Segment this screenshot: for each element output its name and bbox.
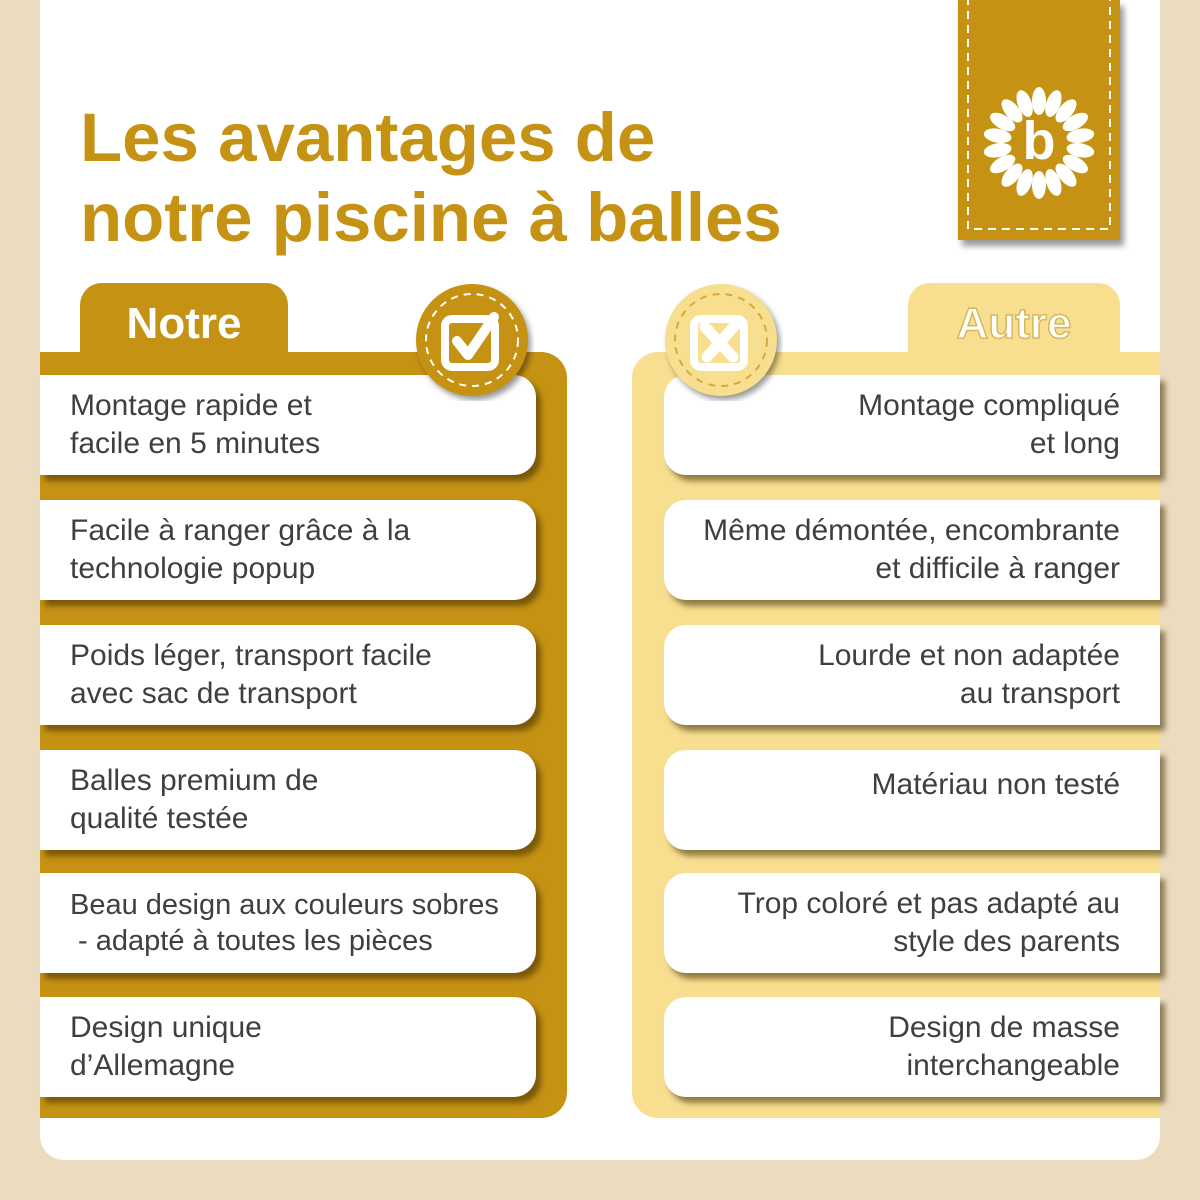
card: r1: Montage compliqué <box>858 389 1120 422</box>
card: l2: Facile à ranger grâce à la <box>70 514 410 547</box>
card: r6: Design de masse <box>888 1011 1120 1044</box>
card: l1: facile en 5 minutes <box>70 427 320 460</box>
panel: autre <box>632 283 1160 1118</box>
title <box>80 99 782 256</box>
card: l3: avec sac de transport <box>70 677 357 710</box>
card: l1: Montage rapide et <box>70 389 312 422</box>
card: r2: et difficile à ranger <box>875 552 1120 585</box>
card: r2 <box>664 500 1160 600</box>
panel: notre <box>40 283 567 1118</box>
tab: autre: Autre <box>957 299 1071 348</box>
card: r5: style des parents <box>893 925 1120 958</box>
card: l3: Poids léger, transport facile <box>70 639 432 672</box>
card: r1 <box>664 375 1160 475</box>
tab: autre <box>908 283 1120 363</box>
card: l1 <box>40 375 536 475</box>
card: l2: technologie popup <box>70 552 315 585</box>
title: notre piscine à balles <box>80 179 782 256</box>
card: r1: et long <box>1030 427 1120 460</box>
icon: cross <box>664 284 783 401</box>
card: l5 <box>40 873 536 973</box>
card: l2 <box>40 500 536 600</box>
tab: notre: Notre <box>127 299 241 348</box>
card: r4 <box>664 750 1160 850</box>
card: l5: - adapté à toutes les pièces <box>78 925 433 957</box>
title: Les avantages de <box>80 99 655 176</box>
tab: notre <box>80 283 288 363</box>
card: l4: qualité testée <box>70 802 248 835</box>
card: r6: interchangeable <box>906 1049 1120 1082</box>
card: r6 <box>664 997 1160 1097</box>
card: r5 <box>664 873 1160 973</box>
card: l4: Balles premium de <box>70 764 318 797</box>
card: l6 <box>40 997 536 1097</box>
card: r4: Matériau non testé <box>872 768 1120 801</box>
card: l3 <box>40 625 536 725</box>
logo tag <box>958 0 1120 240</box>
icon: check <box>416 284 534 401</box>
card: r3 <box>664 625 1160 725</box>
card: r5: Trop coloré et pas adapté au <box>738 887 1120 920</box>
logo tag: b <box>1022 111 1056 171</box>
card: r3: Lourde et non adaptée <box>818 639 1120 672</box>
card: r3: au transport <box>960 677 1120 710</box>
card: l5: Beau design aux couleurs sobres <box>70 889 499 921</box>
card: l6: Design unique <box>70 1011 262 1044</box>
card: l6: d’Allemagne <box>70 1049 235 1082</box>
card: r2: Même démontée, encombrante <box>703 514 1120 547</box>
card: l4 <box>40 750 536 850</box>
